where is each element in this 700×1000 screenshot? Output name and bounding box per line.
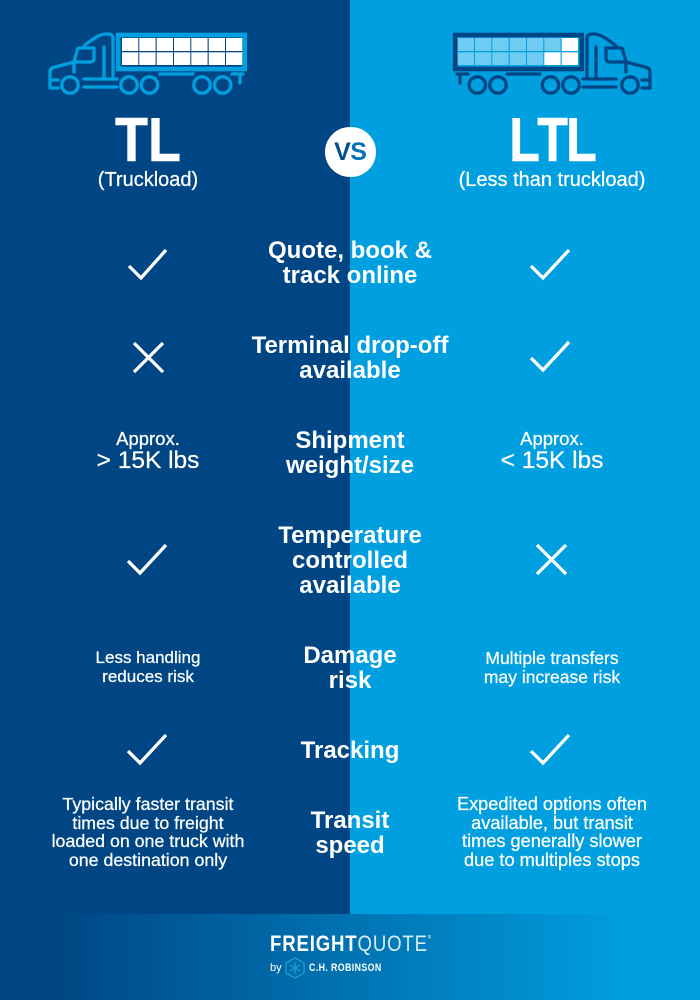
- heading: Temperature controlled available: controlled: [292, 547, 408, 574]
- badge: VS: [325, 126, 376, 177]
- text: LTL transit: times generally slower: [462, 831, 642, 851]
- heading: Quote, book & track online: [268, 237, 432, 289]
- badge: VS: VS: [334, 138, 366, 166]
- heading: Damage risk: risk: [329, 667, 371, 694]
- text: TL damage: Less handling: [96, 648, 200, 667]
- text: LTL transit: Expedited options often: [457, 794, 647, 814]
- text: TL transit: loaded on one truck with: [52, 831, 244, 851]
- text: LTL damage: may increase risk: [484, 667, 620, 687]
- text: LTL weight: [501, 428, 603, 474]
- text: TL weight: Approx.: [116, 428, 180, 449]
- heading: Shipment weight/size: weight/size: [286, 452, 414, 479]
- heading: Shipment weight/size: [286, 427, 414, 479]
- heading: Temperature controlled available: Temperature: [278, 522, 422, 549]
- text: TL weight: > 15K lbs: [97, 447, 199, 474]
- icon: less than truckload truck: [452, 32, 652, 95]
- heading: Terminal drop-off available: available: [299, 357, 401, 384]
- heading: Terminal drop-off available: [252, 332, 449, 384]
- text: TL transit: Typically faster transit: [63, 794, 233, 814]
- subtitle: Truckload: (Truckload): [98, 169, 198, 191]
- heading: Transit speed: [310, 807, 390, 859]
- text: LTL damage: [484, 648, 620, 687]
- logo byline: by: [270, 962, 282, 974]
- heading: Quote, book & track online: track online: [283, 262, 417, 289]
- heading: Damage risk: [303, 642, 397, 694]
- text: LTL transit: [457, 794, 647, 870]
- text: LTL weight: < 15K lbs: [501, 447, 603, 474]
- text: TL damage: reduces risk: [102, 667, 194, 686]
- icon: truckload truck: [48, 32, 248, 95]
- heading: Shipment weight/size: Shipment: [295, 427, 405, 454]
- text: TL damage: [96, 648, 200, 686]
- panel: TL left column: [0, 0, 350, 914]
- title: TL: TL: [115, 106, 180, 174]
- subtitle: Less than truckload: (Less than truckload): [459, 169, 645, 191]
- text: TL weight: [97, 428, 199, 474]
- text: LTL damage: Multiple transfers: [485, 648, 619, 668]
- panel: LTL right column: [350, 0, 700, 914]
- heading: Damage risk: Damage: [303, 642, 397, 669]
- text: LTL transit: due to multiples stops: [464, 850, 640, 870]
- heading: Transit speed: speed: [315, 832, 385, 859]
- heading: Terminal drop-off available: Terminal drop-off: [252, 332, 448, 359]
- logo hexagon icon: [285, 957, 305, 979]
- heading: Transit speed: Transit: [311, 807, 389, 834]
- logo company name: C.H. ROBINSON: [309, 962, 382, 974]
- text: LTL transit: available, but transit: [471, 813, 633, 833]
- heading: Temperature controlled available: [278, 522, 422, 599]
- footer band: [0, 914, 700, 1000]
- heading: Tracking: Tracking: [301, 737, 399, 764]
- heading: Quote, book & track online: Quote, book &: [268, 237, 432, 264]
- text: LTL weight: Approx.: [520, 428, 584, 449]
- logo wordmark: FREIGHTQUOTE®: [270, 931, 432, 956]
- text: TL transit: one destination only: [69, 850, 227, 870]
- text: TL transit: times due to freight: [72, 813, 224, 833]
- heading: Temperature controlled available: available: [299, 572, 401, 599]
- logo: Freightquote by C.H. Robinson: [270, 931, 432, 979]
- text: TL transit: [52, 794, 244, 870]
- title: LTL: LTL: [509, 106, 597, 174]
